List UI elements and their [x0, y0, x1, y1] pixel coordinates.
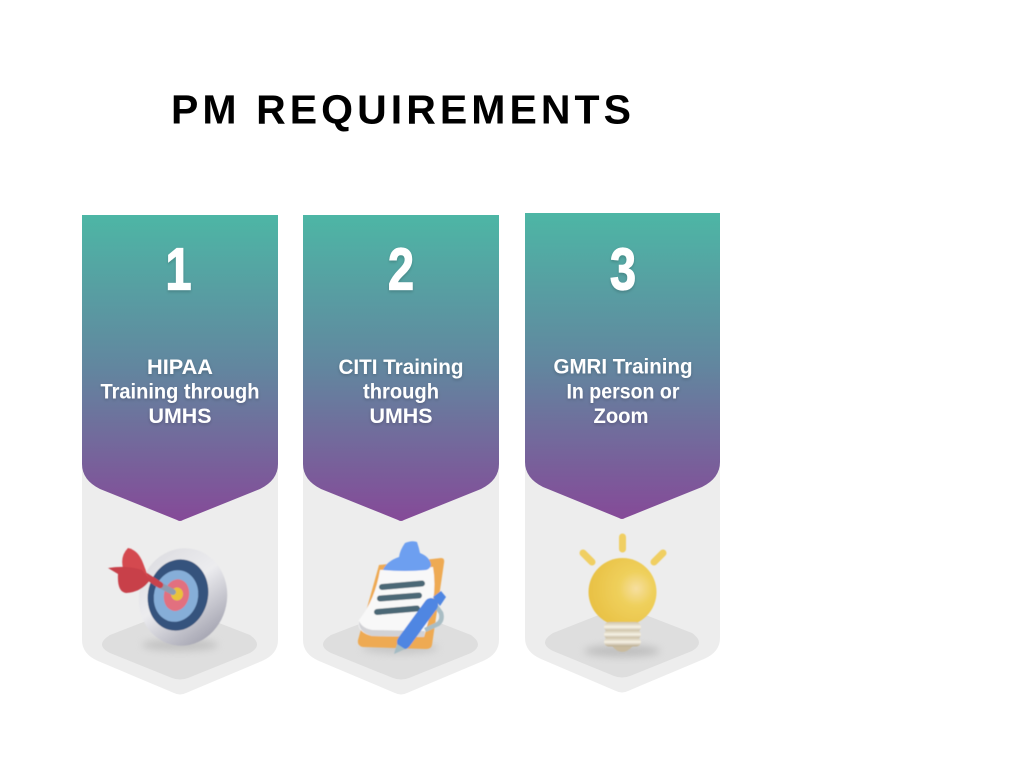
title: PM REQUIREMENTS [171, 86, 631, 132]
card background [303, 400, 499, 694]
platform [323, 610, 478, 680]
gradient banner [303, 215, 499, 521]
label: HIPAA Training through UMHS: Training through [100, 380, 260, 404]
gradient banner [525, 213, 720, 519]
platform [102, 610, 257, 680]
icon: dartboard with dart [108, 540, 236, 654]
panel: requirement 1 HIPAA [82, 215, 278, 694]
label: GMRI Training In person or Zoom [554, 356, 692, 428]
icon: light bulb [583, 537, 663, 657]
label: HIPAA Training through UMHS: HIPAA [147, 356, 213, 379]
gradient banner [82, 215, 278, 521]
label: CITI Training through UMHS: CITI Training [338, 356, 464, 379]
panel: requirement 3 GMRI [525, 213, 720, 692]
card background [82, 400, 278, 694]
label: HIPAA Training through UMHS: UMHS [148, 405, 212, 428]
label: CITI Training through UMHS: UMHS [370, 405, 432, 428]
panel: requirement 2 CITI [303, 215, 499, 694]
label: CITI Training through UMHS [338, 356, 464, 428]
label: GMRI Training In person or Zoom: GMRI Training [554, 356, 692, 378]
platform [545, 608, 699, 678]
label: GMRI Training In person or Zoom: In person or [566, 380, 680, 404]
number 1: 1 [165, 238, 192, 303]
label: HIPAA Training through UMHS [100, 356, 260, 428]
label: CITI Training through UMHS: through [363, 380, 439, 404]
label: GMRI Training In person or Zoom: Zoom [594, 405, 648, 428]
card background [525, 400, 720, 692]
icon: clipboard with pen [358, 541, 446, 654]
number 3: 3 [610, 238, 636, 303]
number 2: 2 [388, 238, 414, 303]
